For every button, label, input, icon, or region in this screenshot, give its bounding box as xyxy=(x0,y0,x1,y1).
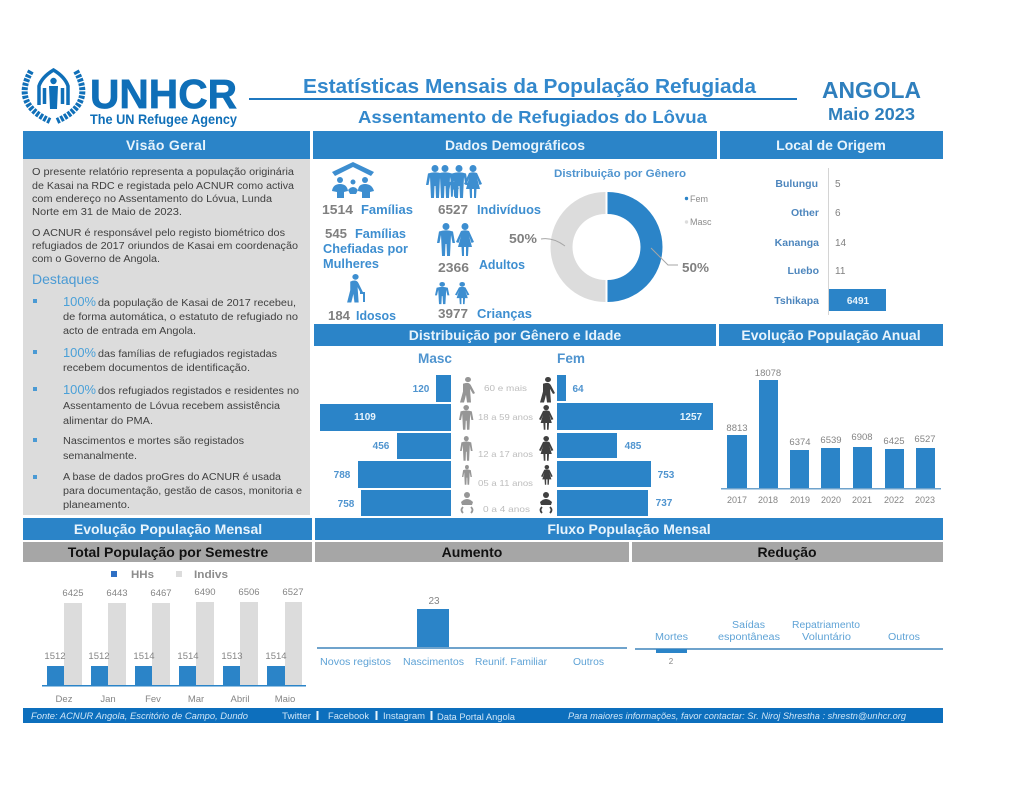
text block: overview: com endereço no Assentamento do Lóvua, Lunda xyxy=(32,194,272,205)
bar chart: monthly population: 6467 xyxy=(150,588,172,599)
contact: Para maiores informações, favor contactar: Sr. Niroj Shrestha : shrestn@unhcr.org xyxy=(568,711,906,721)
icons: female age groups xyxy=(539,377,555,513)
stat: female-headed households: Mulheres xyxy=(323,257,379,271)
panel: Distribuição por Gênero e Idade: Masc xyxy=(418,350,452,366)
bar chart: origin: Kananga xyxy=(775,237,819,249)
bar chart: increase: Outros xyxy=(573,657,604,668)
highlights list: Nascimentos e mortes são registados xyxy=(63,436,244,447)
title: Assentamento de Refugiados do Lôvua xyxy=(358,107,707,127)
country and date: ANGOLA xyxy=(822,77,921,103)
bar chart: decrease: 2 xyxy=(669,657,674,666)
pyramid values: 788 xyxy=(334,470,351,481)
pyramid values: 456 xyxy=(373,441,390,452)
highlights list: dos refugiados registados e residentes no xyxy=(98,386,299,397)
highlights list: semanalmente. xyxy=(63,451,137,462)
bar chart: annual population: 8813 xyxy=(726,423,748,434)
age labels: 12 a 17 anos xyxy=(478,449,533,459)
bar chart: monthly population: 6443 xyxy=(106,588,128,599)
panel: Evolução População Mensal xyxy=(23,518,312,705)
legend: HHs xyxy=(131,569,154,581)
highlights list: acto de entrada em Angola. xyxy=(63,326,196,337)
stat: adults: 2366 xyxy=(438,260,469,275)
icons: male age groups xyxy=(459,377,475,513)
bar chart: monthly population xyxy=(42,587,306,705)
highlights list: 100% xyxy=(63,294,96,309)
text block: overview xyxy=(32,167,298,265)
pyramid values xyxy=(334,384,703,510)
age labels: 60 e mais xyxy=(484,383,527,393)
bar chart: origin: 14 xyxy=(835,238,847,249)
stat: female-headed households xyxy=(323,226,408,271)
pyramid values: 758 xyxy=(338,499,355,510)
legend xyxy=(111,569,228,581)
highlights list: A base de dados proGres do ACNUR é usada xyxy=(63,472,281,483)
bar chart: monthly population: 1514 xyxy=(133,651,155,662)
bar chart: annual population: 2023 xyxy=(915,495,935,505)
bar chart: monthly population: 1513 xyxy=(221,651,243,662)
bar chart: annual population: 2021 xyxy=(852,495,872,505)
panel: Dados Demográficos xyxy=(313,131,717,323)
bar chart: origin: 5 xyxy=(835,179,841,190)
stat: children: 3977 xyxy=(438,306,468,321)
heading: Fluxo População Mensal: Fluxo População Mensal xyxy=(547,521,711,537)
heading: Evolução População Anual: Evolução População Anual xyxy=(741,327,921,343)
title: Estatísticas Mensais da População Refugiada xyxy=(303,76,757,98)
icon: children xyxy=(435,282,469,304)
subheading: Aumento: Aumento xyxy=(442,544,502,560)
panel: Evolução População Anual xyxy=(719,324,943,505)
population pyramid: male xyxy=(320,375,451,516)
bar chart: decrease: espontâneas xyxy=(718,632,780,643)
source: Fonte: ACNUR Angola, Escritório de Campo, Dundo xyxy=(31,711,248,721)
bar chart: origin: 6 xyxy=(835,208,841,219)
highlights list: para documentação, gestão de casos, monitoria e xyxy=(63,486,302,497)
donut chart: gender distribution: 50% xyxy=(682,260,709,275)
social links: Facebook xyxy=(328,711,370,721)
highlights list: recebem documentos de identificação. xyxy=(63,363,250,374)
stat: elderly: Idosos xyxy=(356,309,396,323)
stat: families xyxy=(322,202,413,217)
donut chart: gender distribution: 50% xyxy=(509,231,537,246)
donut chart: gender distribution xyxy=(509,168,712,302)
icon: individuals xyxy=(426,165,482,198)
panel: Distribuição por Gênero e Idade xyxy=(314,324,716,516)
tagline: The UN Refugee Agency xyxy=(90,111,237,127)
pyramid values: 1257 xyxy=(680,412,703,423)
subheading: Redução xyxy=(632,542,943,562)
icon: families xyxy=(332,162,374,198)
pyramid values: 64 xyxy=(572,384,584,395)
text block: overview: com o Governo de Angola. xyxy=(32,254,160,265)
bar chart: increase: Reunif. Familiar xyxy=(475,657,548,668)
highlights list xyxy=(33,294,302,511)
heading: Dados Demográficos: Dados Demográficos xyxy=(445,137,585,153)
social links: Instagram xyxy=(383,711,425,721)
pyramid values: 1109 xyxy=(354,412,376,423)
bar chart: annual population: 6539 xyxy=(820,435,842,446)
stat: elderly: 184 xyxy=(328,308,351,323)
heading: Visão Geral: Visão Geral xyxy=(126,137,206,153)
bar chart: origin: 6491 xyxy=(847,296,870,307)
stat: adults: Adultos xyxy=(479,258,525,272)
population pyramid: female xyxy=(557,375,713,516)
heading: Destaques: Destaques xyxy=(32,271,99,287)
heading: Evolução População Mensal: Evolução População Mensal xyxy=(74,521,262,537)
bar chart: decrease: Mortes xyxy=(655,632,688,643)
social links: Twitter xyxy=(282,711,311,721)
stat: children: Crianças xyxy=(477,307,532,321)
bar chart: origin: Other xyxy=(791,207,819,219)
highlights list: alimentar do PMA. xyxy=(63,416,153,427)
bar chart: annual population xyxy=(721,368,941,505)
social links: Data Portal Angola xyxy=(437,712,515,722)
bar chart: increase: 23 xyxy=(428,596,440,607)
bar chart: annual population: 6374 xyxy=(789,437,811,448)
stat: individuals xyxy=(438,202,541,217)
subheading: Redução: Redução xyxy=(757,544,817,560)
age labels: 18 a 59 anos xyxy=(478,412,533,422)
highlights list: Assentamento de Lóvua recebem assistência xyxy=(63,401,280,412)
bar chart: annual population: 2019 xyxy=(790,495,810,505)
text block: overview: O presente relatório representa a população originária xyxy=(32,167,294,178)
bar chart: annual population: 2017 xyxy=(727,495,747,505)
legend xyxy=(685,194,712,227)
stat: female-headed households: Famílias xyxy=(355,227,406,241)
social links xyxy=(282,711,515,722)
pyramid values: 753 xyxy=(658,470,675,481)
highlights list: das famílias de refugiados registadas xyxy=(98,349,277,360)
panel: Local de Origem xyxy=(720,131,943,315)
panel: Distribuição por Gênero e Idade: Fem xyxy=(557,350,585,366)
stat: female-headed households: 545 xyxy=(325,226,347,241)
heading: Distribuição por Gênero e Idade: Distribuição por Gênero e Idade xyxy=(409,327,621,343)
stat: individuals: 6527 xyxy=(438,202,468,217)
heading: Local de Origem: Local de Origem xyxy=(776,137,886,153)
icon: elderly xyxy=(347,274,365,302)
bar chart: decrease: Voluntário xyxy=(802,632,851,643)
bar chart: monthly population: 6527 xyxy=(282,587,304,598)
stat: female-headed households: Chefiadas por xyxy=(323,242,408,256)
bar chart: origin: Tshikapa xyxy=(774,295,819,307)
icon: UNHCR emblem xyxy=(25,70,82,121)
bar chart: annual population: 2022 xyxy=(884,495,904,505)
country and date: Maio 2023 xyxy=(828,104,915,124)
country and date xyxy=(822,77,921,124)
bar chart: decrease: Repatriamento xyxy=(792,620,860,631)
legend: Fem xyxy=(690,194,708,204)
age labels xyxy=(478,383,533,514)
bar chart: annual population: 6908 xyxy=(851,432,873,443)
stat: adults xyxy=(438,258,525,275)
panel: Fluxo População Mensal xyxy=(315,518,943,668)
text block: overview: O ACNUR é responsável pelo registo biométrico dos xyxy=(32,228,285,239)
bar chart: decrease xyxy=(635,620,943,666)
bar chart: monthly population: Maio xyxy=(275,694,295,705)
bar chart: origin: 11 xyxy=(835,266,846,277)
age labels: 05 a 11 anos xyxy=(478,478,533,488)
bar chart: increase: Nascimentos xyxy=(403,657,464,668)
bar chart: decrease: Outros xyxy=(888,632,920,643)
stat: children xyxy=(438,306,532,321)
stat: elderly xyxy=(328,308,396,323)
bar chart: monthly population: 1514 xyxy=(177,651,199,662)
bar chart: origin xyxy=(774,168,886,315)
bar chart: increase xyxy=(317,596,627,668)
highlights list: da população de Kasai de 2017 recebeu, xyxy=(98,298,296,309)
footer xyxy=(23,708,943,723)
highlights list: planeamento. xyxy=(63,500,130,511)
bar chart: annual population: 6527 xyxy=(914,434,936,445)
bar chart: annual population: 18078 xyxy=(755,368,781,379)
bar chart: monthly population: 6425 xyxy=(62,588,84,599)
bar chart: monthly population: Fev xyxy=(145,694,161,705)
UNHCR wordmark: UNHCR xyxy=(90,71,237,117)
panel: Visão Geral xyxy=(23,131,310,515)
highlights list: 100% xyxy=(63,382,96,397)
bar chart: annual population: 2020 xyxy=(821,495,841,505)
bar chart: annual population: 6425 xyxy=(883,436,905,447)
bar chart: decrease: Saídas xyxy=(732,620,765,631)
legend: Indivs xyxy=(194,569,228,581)
highlights list: de forma automática, o estatuto de refugiado no xyxy=(63,312,298,323)
bar chart: increase: Novos registos xyxy=(320,657,391,668)
subheading: Aumento xyxy=(315,542,629,562)
bar chart: monthly population: Jan xyxy=(100,694,116,705)
icon: adults xyxy=(437,223,474,256)
text block: overview: Norte em 31 de Maio de 2023. xyxy=(32,207,182,218)
pyramid values: 120 xyxy=(413,384,430,395)
bar chart: annual population: 2018 xyxy=(758,495,778,505)
pyramid values: 737 xyxy=(656,498,673,509)
stat: families: Famílias xyxy=(361,203,413,217)
bar chart: monthly population: 6490 xyxy=(194,587,216,598)
highlights list: 100% xyxy=(63,345,96,360)
donut chart: gender distribution: Distribuição por Gênero xyxy=(554,168,686,180)
bar chart: origin: Luebo xyxy=(788,265,819,277)
text block: overview: de Kasai na RDC e registada pelo ACNUR como activa xyxy=(32,181,294,192)
legend: Masc xyxy=(690,217,712,227)
bar chart: monthly population: 1512 xyxy=(44,651,66,662)
text block: overview: refugiados de 2017 oriundos de Kasai em coordenação xyxy=(32,241,298,252)
bar chart: origin: Bulungu xyxy=(775,178,818,190)
age labels: 0 a 4 anos xyxy=(483,504,530,514)
pyramid values: 485 xyxy=(625,441,642,452)
bar chart: monthly population: Dez xyxy=(56,694,73,705)
bar chart: monthly population: 1512 xyxy=(88,651,110,662)
stat: individuals: Indivíduos xyxy=(477,203,541,217)
bar chart: monthly population: 1514 xyxy=(265,651,287,662)
bar chart: monthly population: Abril xyxy=(230,694,250,705)
bar chart: monthly population: Mar xyxy=(188,694,204,705)
title xyxy=(249,76,797,127)
bar chart: monthly population: 6506 xyxy=(238,587,260,598)
subheading: Total População por Semestre: Total População por Semestre xyxy=(68,544,268,560)
logo: UNHCR xyxy=(25,70,237,127)
stat: families: 1514 xyxy=(322,202,354,217)
